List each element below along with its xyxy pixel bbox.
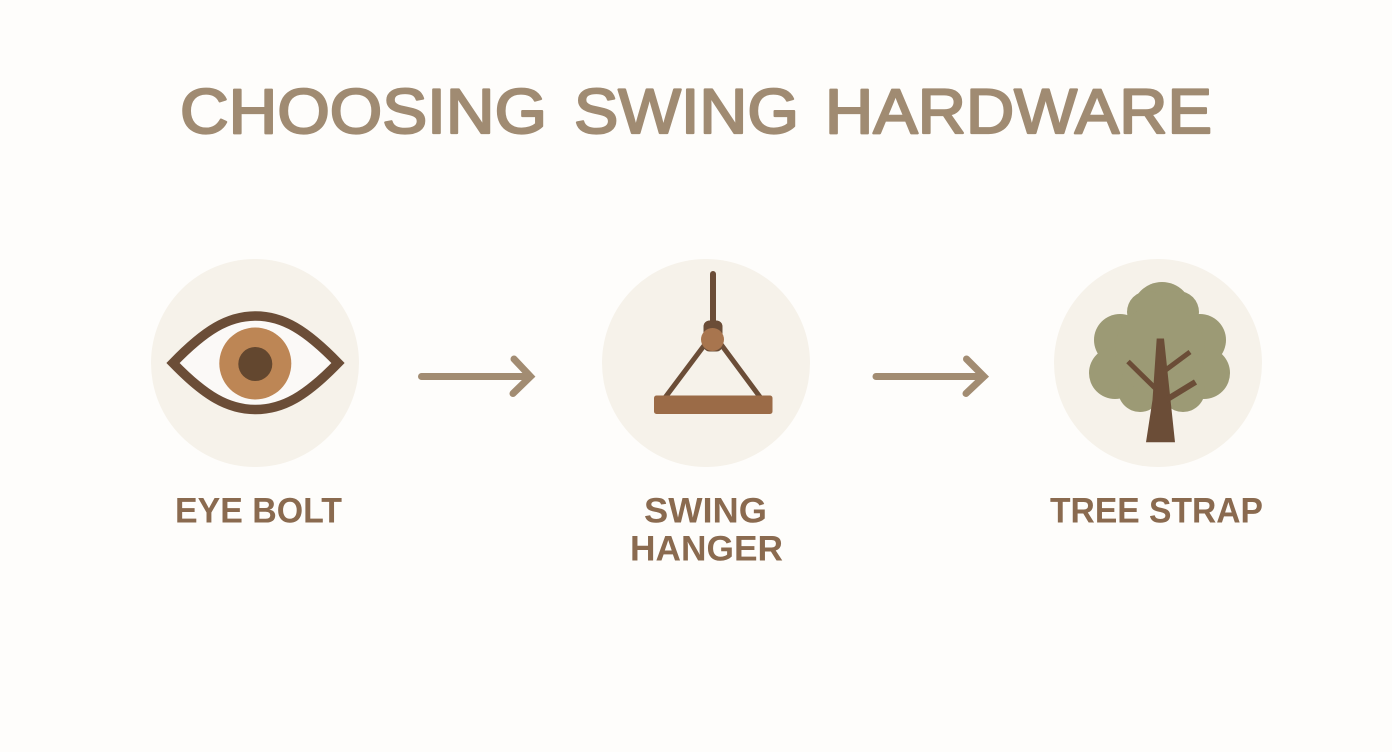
icon: eye pupil bbox=[238, 347, 272, 381]
icon: hanger pivot bbox=[701, 328, 724, 351]
icon: eye bolt circle background bbox=[151, 259, 359, 467]
icon: tree crown bbox=[1089, 282, 1230, 412]
panel: swing hanger bbox=[602, 259, 810, 568]
label: eye bolt: EYE BOLT bbox=[175, 492, 342, 530]
icon: swing hanger circle background bbox=[602, 259, 810, 467]
label: swing hanger bbox=[630, 492, 783, 568]
arrow: swing hanger to tree strap bbox=[876, 359, 984, 394]
icon: hanger clamp bbox=[704, 320, 722, 352]
title word: hardware: HARDWARE bbox=[825, 77, 1212, 147]
arrow: eye bolt to swing hanger bbox=[422, 359, 530, 394]
icon: tree circle background bbox=[1054, 259, 1262, 467]
label line: hanger: HANGER bbox=[630, 530, 783, 568]
icon: eye outline bbox=[173, 316, 338, 410]
panel: tree strap bbox=[1050, 259, 1263, 530]
title bbox=[180, 77, 1212, 147]
icon: hanger triangle straps bbox=[666, 343, 760, 397]
panel: eye bolt bbox=[151, 259, 359, 530]
label line: swing: SWING bbox=[644, 492, 767, 530]
title word: swing: SWING bbox=[574, 77, 799, 147]
label: tree strap: TREE STRAP bbox=[1050, 492, 1263, 530]
icon: eye iris bbox=[219, 328, 291, 400]
icon: swing seat bbox=[654, 396, 772, 414]
icon: tree trunk and branches bbox=[1128, 338, 1196, 442]
icon: hanger rope bbox=[710, 274, 716, 325]
title word: choosing: CHOOSING bbox=[180, 77, 547, 147]
